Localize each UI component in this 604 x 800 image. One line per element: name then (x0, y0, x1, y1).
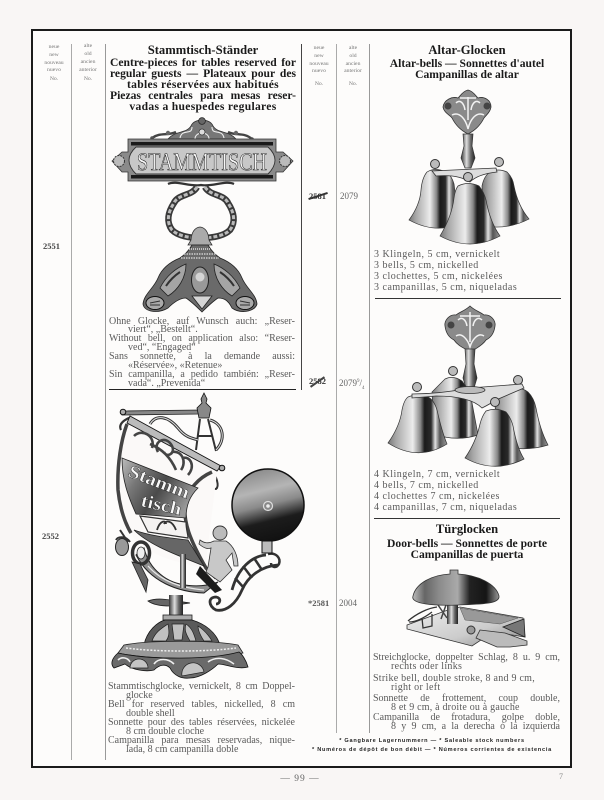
heading: Türglocken (387, 522, 547, 561)
divider under four bells caption (374, 518, 560, 519)
caption: four altar bells (374, 469, 517, 513)
caption: three altar bells: 3 clochettes, 5 cm, nickelées (374, 271, 503, 282)
caption: door bell: Strike bell, double stroke, 8 and 9 cm, (373, 673, 535, 684)
signature mark: 7 (559, 772, 563, 781)
caption: Stammtisch bell: double shell (126, 708, 175, 719)
heading: Altar-Glocken (390, 43, 544, 81)
column header: left new numbers (44, 44, 64, 82)
item number 2552: 2552 (42, 531, 59, 541)
caption: Stammtisch bell: Campanilla para mesas reservadas, nique- (108, 735, 295, 746)
cherub (196, 526, 238, 593)
bell dome (232, 469, 304, 541)
column header: right old numbers: alte (349, 45, 357, 51)
caption: four altar bells: 4 bells, 7 cm, nickelled (374, 480, 479, 491)
caption: Stammtisch bell: glocke (126, 690, 153, 701)
caption: Stammtisch bell: Sonnette pour des tables réservées, nickelée (108, 717, 295, 728)
caption: three altar bells: 3 Klingeln, 5 cm, vernickelt (374, 249, 500, 260)
heading: Altar-Glocken: Altar-Glocken (428, 43, 506, 57)
heading: Stammtisch-Ständer: regular guests — Plateaux pour des (110, 67, 296, 80)
column header: left old numbers: No. (84, 76, 92, 82)
caption: three altar bells: 3 campanillas, 5 cm, niqueladas (374, 282, 517, 293)
column header: left old numbers: old (84, 51, 92, 57)
heading: Stammtisch-Ständer (110, 43, 296, 113)
plaque crest (150, 118, 254, 141)
rod and finial (120, 393, 222, 489)
old number 2079: 2079 (340, 191, 358, 201)
column header: left old numbers: anterior (79, 67, 97, 73)
head and scroll (116, 530, 150, 592)
caption: four altar bells: 4 Klingeln, 7 cm, vernickelt (374, 469, 500, 480)
illustration: Stammtisch bell (112, 393, 304, 678)
plaque: STAMMTISCH (137, 149, 267, 176)
caption: door bell: Campanilla de frotadura, golpe doble, (373, 712, 560, 723)
column header: right old numbers: ancien (346, 61, 360, 67)
scroll ring (168, 183, 234, 238)
column header: right new numbers: nuevo (312, 68, 326, 74)
column header: right old numbers: anterior (344, 68, 362, 74)
bridge plate (432, 168, 497, 182)
footnote: * Numéros de dépôt de bon débit — * Números corrientes de existencia (312, 747, 552, 753)
heading: Türglocken: Türglocken (436, 522, 498, 536)
item number 2581 struck: 2581 (309, 191, 326, 201)
pillar (447, 604, 458, 624)
cast pedestal (112, 595, 248, 678)
caption: Stammtisch bell: lada, 8 cm campanilla doble (126, 744, 238, 755)
front bell (465, 398, 524, 466)
caption: Stammtisch stand (109, 316, 295, 389)
caption: Stammtisch bell: Stammtischglocke, vernickelt, 8 cm Doppel- (108, 681, 295, 692)
column header: right new numbers: new (314, 53, 324, 59)
column header: left new numbers: neue (49, 44, 59, 50)
handle stem (461, 134, 475, 168)
heading: Altar-Glocken: Altar-bells — Sonnettes d'autel (390, 57, 544, 70)
column header: left old numbers: ancien (81, 59, 95, 65)
handle crest (445, 306, 495, 352)
column header: right new numbers: neue (314, 45, 324, 51)
heading: Stammtisch-Ständer: tables réservées aux habitués (127, 78, 279, 91)
column header: right old numbers: old (349, 53, 357, 59)
caption: Stammtisch bell: 8 cm double cloche (126, 726, 204, 737)
caption: Stammtisch stand: Sin campanilla, a pedido también: „Reser- (109, 369, 295, 380)
caption: three altar bells: 3 bells, 5 cm, nickelled (374, 260, 479, 271)
caption: Stammtisch stand: Without bell, on application also: “Reser- (109, 333, 295, 344)
column header: left old numbers (79, 43, 97, 82)
illustration: four altar bells (388, 306, 548, 466)
star plate (412, 384, 524, 408)
horn sign: Stamm (126, 461, 192, 503)
right bell (494, 376, 548, 449)
back bell (432, 366, 478, 438)
column rules (71, 44, 72, 760)
caption: Stammtisch bell (108, 681, 295, 755)
left bell (388, 382, 447, 453)
mounting plate (407, 607, 525, 646)
caption: four altar bells: 4 campanillas, 7 cm, niqueladas (374, 502, 517, 513)
caption: Stammtisch stand: vada“. „Prevenida“ (128, 378, 205, 389)
item number 2581: *2581 (308, 598, 329, 608)
old number 2079 9/4: 20799/4 (339, 378, 365, 391)
caption: Stammtisch bell: Bell for reserved tables, nickelled, 8 cm (108, 699, 295, 710)
caption: four altar bells: 4 clochettes 7 cm, nickelées (374, 491, 500, 502)
plaque (112, 139, 293, 181)
footnote: * Gangbare Lagernummern — * Saleable stock numbers (339, 738, 525, 744)
divider under three bells caption (375, 298, 561, 299)
page number: — 99 — (280, 774, 320, 784)
horn sign (118, 416, 225, 593)
illustration: three altar bells (409, 90, 529, 244)
column header: left new numbers: No. (50, 76, 58, 82)
column header: left new numbers: new (49, 52, 59, 58)
column header: right new numbers (309, 45, 329, 87)
caption: door bell: Sonnette de frottement, coup double, (373, 693, 560, 704)
front bell (440, 172, 500, 244)
illustration: door bell (407, 570, 527, 647)
item number 2551: 2551 (43, 241, 60, 251)
caption: Stammtisch stand: «Réservée», «Retenue» (128, 360, 222, 371)
divider under stand caption (109, 389, 296, 390)
heading: Stammtisch-Ständer: Centre-pieces for tables reserved for (110, 56, 296, 69)
column header: left new numbers: nuevo (47, 67, 61, 73)
heading: Türglocken: Campanillas de puerta (411, 548, 523, 561)
caption: three altar bells (374, 249, 517, 293)
caption: door bell: right or left (391, 682, 440, 693)
caption: Stammtisch stand: Sans sonnette, à la demande aussi: (109, 351, 295, 362)
column header: left old numbers: alte (84, 43, 92, 49)
old number 2004: 2004 (339, 598, 357, 608)
dome (413, 570, 499, 605)
heading: Stammtisch-Ständer: Stammtisch-Ständer (148, 43, 258, 57)
column header: right new numbers: nouveau (309, 61, 329, 67)
text: No. (315, 81, 323, 87)
handle stem (463, 349, 477, 388)
caption: door bell: Streichglocke, doppelter Schlag, 8 u. 9 cm, (373, 652, 560, 663)
caption: Stammtisch stand: ved“, “Engaged“ (128, 342, 196, 353)
heading: Stammtisch-Ständer: Piezas centrales para mesas reser- (110, 89, 296, 102)
rear left bell (409, 160, 459, 228)
handle crest (443, 90, 491, 134)
heading: Türglocken: Door-bells — Sonnettes de porte (387, 537, 547, 550)
column header: right old numbers (344, 45, 362, 87)
caption: Stammtisch stand: Ohne Glocke, auf Wunsch auch: „Reser- (109, 316, 295, 327)
caption: door bell (373, 652, 560, 732)
illustration: Stammtisch stand (112, 118, 293, 312)
cast base (143, 227, 257, 312)
caption: door bell: rechts oder links (391, 661, 462, 672)
item number 2582 struck: 2582 (309, 376, 326, 386)
caption: door bell: 8 et 9 cm, à droite ou à gauche (391, 702, 520, 713)
heading: Stammtisch-Ständer: vadas a huespedes regulares (129, 100, 277, 113)
text: No. (349, 81, 357, 87)
caption: door bell: 8 y 9 cm, a la derecha ó la izquierda (391, 721, 560, 732)
strike lever (476, 630, 527, 647)
heading: Altar-Glocken: Campanillas de altar (415, 68, 519, 81)
column header: left new numbers: nouveau (44, 60, 64, 66)
rear right bell (482, 158, 529, 227)
footnote (312, 738, 552, 753)
horn sign: tisch (139, 490, 184, 519)
caption: Stammtisch stand: viert“, „Bestellt“. (128, 324, 198, 335)
bell arm (210, 541, 279, 610)
